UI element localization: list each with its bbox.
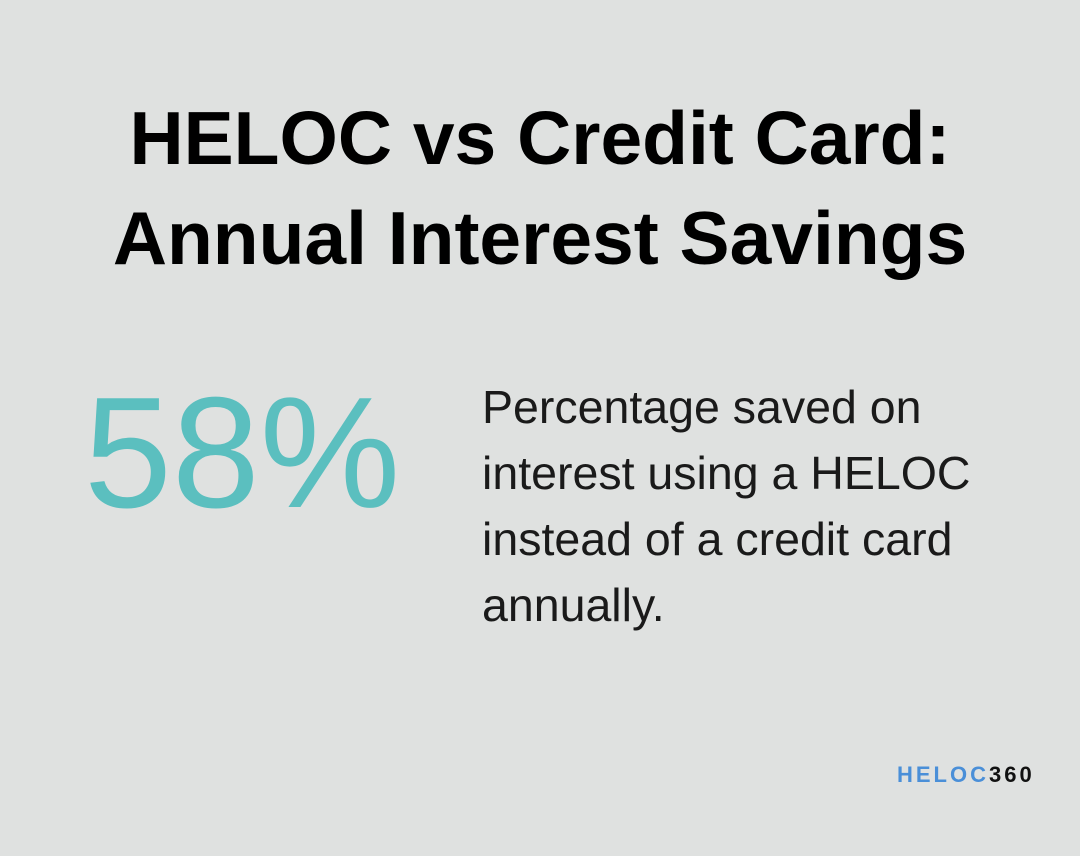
description text: annually. bbox=[482, 579, 665, 631]
title: Annual Interest Savings bbox=[113, 196, 967, 280]
logo: HELOC360 bbox=[897, 762, 1035, 787]
description text: interest using a HELOC bbox=[482, 447, 970, 499]
title bbox=[113, 96, 967, 280]
title: HELOC vs Credit Card: bbox=[130, 96, 950, 180]
description text bbox=[482, 381, 970, 631]
description text: instead of a credit card bbox=[482, 513, 952, 565]
big statistic: 58% bbox=[84, 365, 400, 541]
description text: Percentage saved on bbox=[482, 381, 921, 433]
